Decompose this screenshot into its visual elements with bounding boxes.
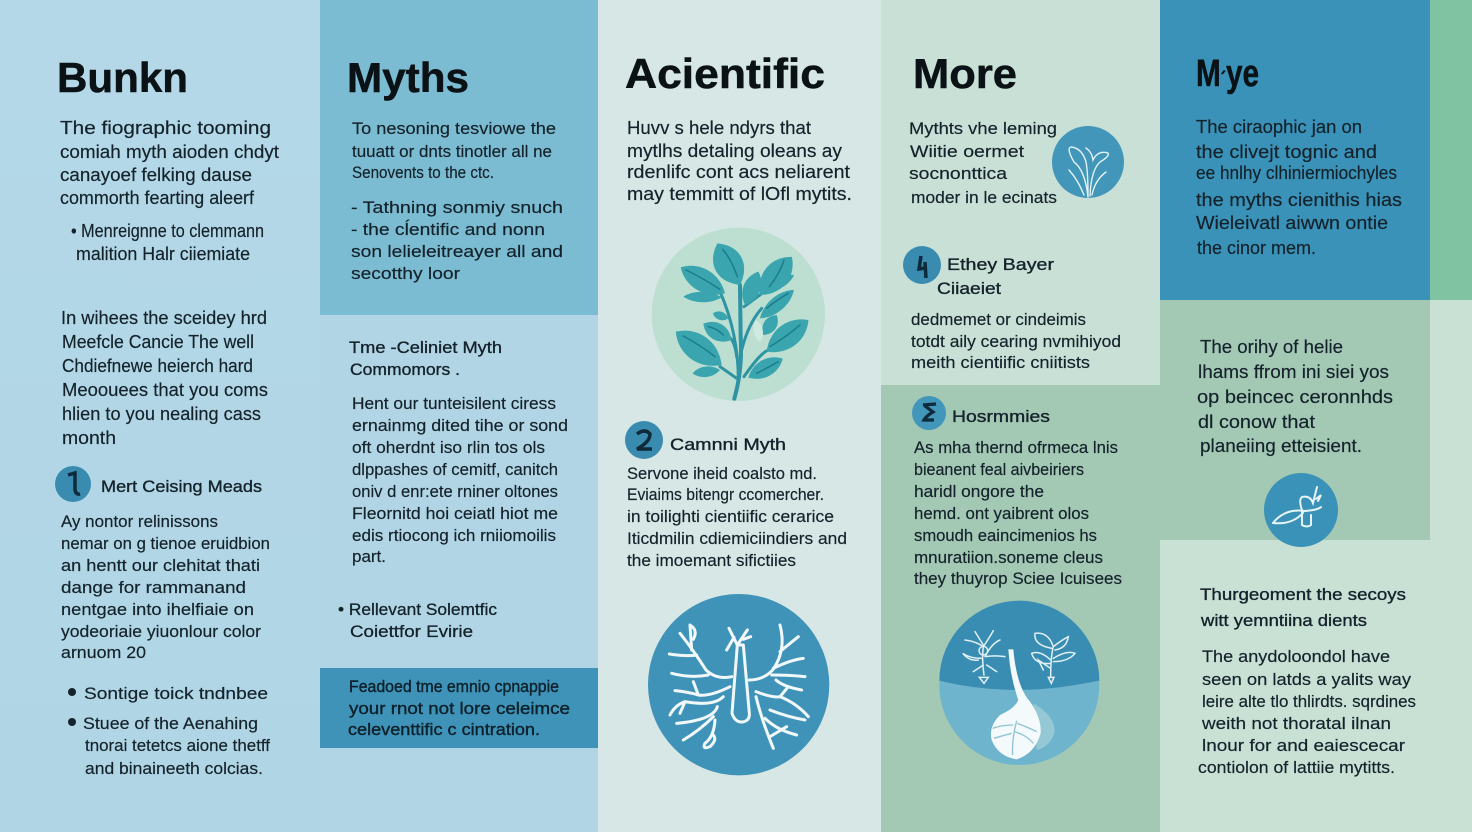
text block: section 1: an hentt our clehitat thati bbox=[61, 556, 260, 575]
text block: section 1: dange for rammanand bbox=[61, 578, 246, 597]
text block: intro: tuuatt or dnts tinotler all ne bbox=[352, 142, 552, 161]
list: bullets: tnorai tetetcs aione thetff bbox=[85, 736, 270, 755]
text block: intro: mytlhs detaling oleans ay bbox=[627, 141, 842, 161]
text block: intro bbox=[60, 118, 279, 208]
subheading: Mert Ceising Meads: Mert Ceising Meads bbox=[101, 477, 262, 496]
text block: section 1: yodeoriaie yiuonlour color bbox=[61, 622, 261, 641]
subheading: Ethey Bayer Ciiaeiet: Ethey Bayer bbox=[947, 255, 1054, 274]
text block: intro bbox=[1196, 117, 1402, 258]
list: dashes: son lelieleitreayer all and bbox=[351, 242, 563, 261]
icon: number badge 4 bbox=[903, 246, 941, 284]
icon: plant and root circle bbox=[939, 601, 1099, 765]
panel: column 2 bbox=[320, 54, 598, 748]
text block: section 5: hemd. ont yaibrent olos bbox=[914, 504, 1089, 523]
text block: section 5: As mha thernd ofrmeca lnis bbox=[914, 438, 1118, 457]
icon: sprout circle bbox=[1052, 126, 1124, 198]
panel: column 4 bbox=[903, 50, 1124, 765]
text block: section: edis rtiocong ich rniiomoilis bbox=[352, 526, 556, 545]
subheading: Tme -Celiniet Myth bbox=[349, 338, 502, 379]
text block: intro: The ciraophic jan on bbox=[1196, 117, 1362, 137]
text block: intro: ee hnlhy clhiniermiochyles bbox=[1196, 163, 1397, 183]
text block: intro: the myths cienithis hias bbox=[1196, 190, 1402, 210]
subheading: Tme -Celiniet Myth: Tme -Celiniet Myth bbox=[349, 338, 502, 357]
text block: section 1: Ay nontor relinissons bbox=[61, 512, 218, 531]
text block: intro: canayoef felking dause bbox=[60, 165, 252, 185]
text block: middle: dl conow that bbox=[1198, 412, 1315, 432]
text block: intro bbox=[627, 118, 852, 204]
panel: column 1 bbox=[55, 54, 279, 778]
text block: section 4: meith cientiific cniitists bbox=[911, 353, 1090, 372]
text block: intro: moder in le ecinats bbox=[911, 188, 1057, 207]
text block: section 4: dedmemet or cindeimis bbox=[911, 310, 1086, 329]
text block: section: dlppashes of cemitf, canitch bbox=[352, 460, 558, 479]
icon: number badge 5 bbox=[912, 396, 946, 430]
text block: intro: Senovents to the ctc. bbox=[352, 163, 494, 182]
callout: celeventtific c cintration. bbox=[348, 720, 540, 739]
text block: section 5 bbox=[914, 438, 1122, 588]
text block: intro bbox=[909, 119, 1057, 207]
text block: middle paragraph: In wihees the sceidey hrd bbox=[61, 308, 267, 328]
text block: section: part. bbox=[352, 547, 386, 566]
text block: closing bbox=[1198, 647, 1416, 777]
text block: section 1: nemar on g tienoe eruidbion bbox=[61, 534, 270, 553]
text block: section 1: nentgae into ihelfiaie on bbox=[61, 600, 254, 619]
text block: section: Hent our tunteisilent ciress bbox=[352, 394, 556, 413]
text block: section 4: totdt aily cearing nvmihiyod bbox=[911, 332, 1121, 351]
subheading: Ethey Bayer Ciiaeiet bbox=[937, 255, 1054, 298]
heading: M´ye: M´ye bbox=[1196, 53, 1259, 95]
text block: intro: The fiographic tooming bbox=[60, 118, 271, 138]
text block: relevant: Coiettfor Evirie bbox=[350, 622, 473, 641]
text block: section 1: arnuom 20 bbox=[61, 643, 146, 662]
text block: middle: The orihy of helie bbox=[1200, 337, 1343, 357]
text block: intro: comiah myth aioden chdyt bbox=[60, 142, 279, 162]
text block: note bbox=[71, 221, 264, 264]
text block: intro: commorth fearting aleerf bbox=[60, 188, 255, 208]
icon: plant with leaves bbox=[652, 228, 825, 401]
subheading: Hosrmmies: Hosrmmies bbox=[952, 407, 1050, 426]
heading: Myths: Myths bbox=[347, 54, 469, 101]
text block: intro: Wieleivatl aiwwn ontie bbox=[1196, 213, 1388, 233]
callout bbox=[320, 668, 598, 748]
text block: middle: lhams ffrom ini siei yos bbox=[1198, 362, 1389, 382]
subheading: Thurgeoment bbox=[1200, 585, 1406, 630]
text block: section 2 bbox=[627, 464, 847, 570]
subheading: Camnni Myth: Camnni Myth bbox=[670, 435, 786, 454]
list: dashes: - Tathning sonmiy snuch bbox=[351, 198, 563, 217]
subheading: Thurgeoment: witt yemntiina dients bbox=[1200, 611, 1367, 630]
list: dashes: secotthy loor bbox=[351, 264, 460, 283]
text block: section 2: Servone iheid coalsto md. bbox=[627, 464, 817, 483]
text block: section: Fleornitd hoi ceiatl hiot me bbox=[352, 504, 558, 523]
text block: middle paragraph: Chdiefnewe heierch hard bbox=[62, 356, 253, 376]
text block: intro: Wiitie oermet bbox=[910, 142, 1024, 161]
text block: intro: socnonttica bbox=[909, 164, 1008, 183]
text block: intro: may temmitt of lOfl mytits. bbox=[627, 184, 852, 204]
text block: middle paragraph: Meefcle Cancie The well bbox=[62, 332, 254, 352]
text block: section: oniv d enr:ete rniner oltones bbox=[352, 482, 558, 501]
text block: section 2: in toilighti cientiific cerarice bbox=[627, 507, 834, 526]
text block: closing: contiolon of lattiie mytitts. bbox=[1198, 758, 1395, 777]
text block: section 5: mnuratiion.soneme cleus bbox=[914, 548, 1103, 567]
heading: Bunkn: Bunkn bbox=[57, 54, 188, 101]
icon: knot circle bbox=[1264, 473, 1338, 547]
list: dashes: - the cĺentific and nonn bbox=[351, 220, 545, 239]
list: bullets: and binaineeth colcias. bbox=[85, 759, 263, 778]
text block: section: ernainmg dited tihe or sond bbox=[352, 416, 568, 435]
list: dashes bbox=[351, 198, 563, 283]
icon: number badge 1 bbox=[55, 466, 91, 502]
panel: column 5 bbox=[1196, 53, 1416, 777]
text block: section 4 bbox=[911, 310, 1121, 372]
text block: closing: The anydoloondol have bbox=[1202, 647, 1390, 666]
subheading: Tme -Celiniet Myth: Commomors . bbox=[350, 360, 460, 379]
text block: intro: Mythts vhe leming bbox=[909, 119, 1057, 138]
text block: closing: weith not thoratal ilnan bbox=[1201, 714, 1391, 733]
text block: section 5: haridl ongore the bbox=[914, 482, 1044, 501]
text block: note: malition Halr ciiemiate bbox=[76, 244, 250, 264]
text block: intro: To nesoning tesviowe the bbox=[352, 119, 556, 138]
text block: section 5: smoudh eaincimenios hs bbox=[914, 526, 1097, 545]
heading: More: More bbox=[913, 50, 1017, 97]
subheading: Ethey Bayer Ciiaeiet: Ciiaeiet bbox=[937, 279, 1001, 298]
text block: section 5: they thuyrop Sciee Icuisees bbox=[914, 569, 1122, 588]
text block: intro: rdenlifc cont acs neliarent bbox=[627, 162, 850, 182]
text block: middle: op beincec ceronnhds bbox=[1197, 387, 1393, 407]
text block: middle paragraph: hlien to you nealing cass bbox=[62, 404, 261, 424]
text block: middle paragraph: Meoouees that you coms bbox=[62, 380, 268, 400]
callout: Feadoed tme emnio cpnappie bbox=[349, 677, 559, 696]
text block: note: • Menreignne to clemmann bbox=[71, 221, 264, 241]
panel: column 3 bbox=[625, 50, 852, 775]
subheading: Thurgeoment: Thurgeoment the secoys bbox=[1200, 585, 1406, 604]
text block: intro bbox=[352, 119, 556, 182]
text block: middle paragraph: month bbox=[62, 428, 116, 448]
list: bullets: Sontige toick tndnbee bbox=[84, 684, 268, 703]
text block: section 2: Iticdmilin cdiemiciindiers and bbox=[627, 529, 847, 548]
icon: number badge 2 bbox=[625, 421, 663, 459]
text block: middle bbox=[1197, 337, 1393, 456]
text block: middle: planeiing etteisient. bbox=[1200, 436, 1362, 456]
text block: section 5: bieanent feal aivbeiriers bbox=[914, 460, 1084, 479]
text block: middle paragraph bbox=[61, 308, 268, 448]
text block: section 2: Eviaims bitengr ccomercher. bbox=[627, 485, 824, 504]
text block: closing: leire alte tlo thlirdts. sqrdines bbox=[1202, 692, 1416, 711]
text block: relevant: • Rellevant Solemtfic bbox=[338, 600, 498, 619]
text block: section bbox=[352, 394, 568, 566]
text block: intro: Huvv s hele ndyrs that bbox=[627, 118, 811, 138]
heading: Acientific: Acientific bbox=[625, 50, 825, 97]
callout: your rnot not lore celeimce bbox=[349, 699, 570, 718]
text block: section: oft oherdnt iso rlin tos ols bbox=[352, 438, 545, 457]
text block: intro: the cinor mem. bbox=[1197, 238, 1316, 258]
text block: closing: lnour for and eaiescecar bbox=[1202, 736, 1405, 755]
text block: relevant bbox=[338, 600, 498, 641]
icon: branching lungs bbox=[648, 594, 829, 775]
text block: intro: the clivejt tognic and bbox=[1196, 142, 1377, 162]
text block: section 2: the imoemant sifictiies bbox=[627, 551, 796, 570]
text block: closing: seen on latds a yalits way bbox=[1202, 670, 1412, 689]
list: bullets: Stuee of the Aenahing bbox=[83, 714, 258, 733]
text block: section 1 bbox=[61, 512, 270, 662]
list: bullets bbox=[68, 684, 270, 778]
